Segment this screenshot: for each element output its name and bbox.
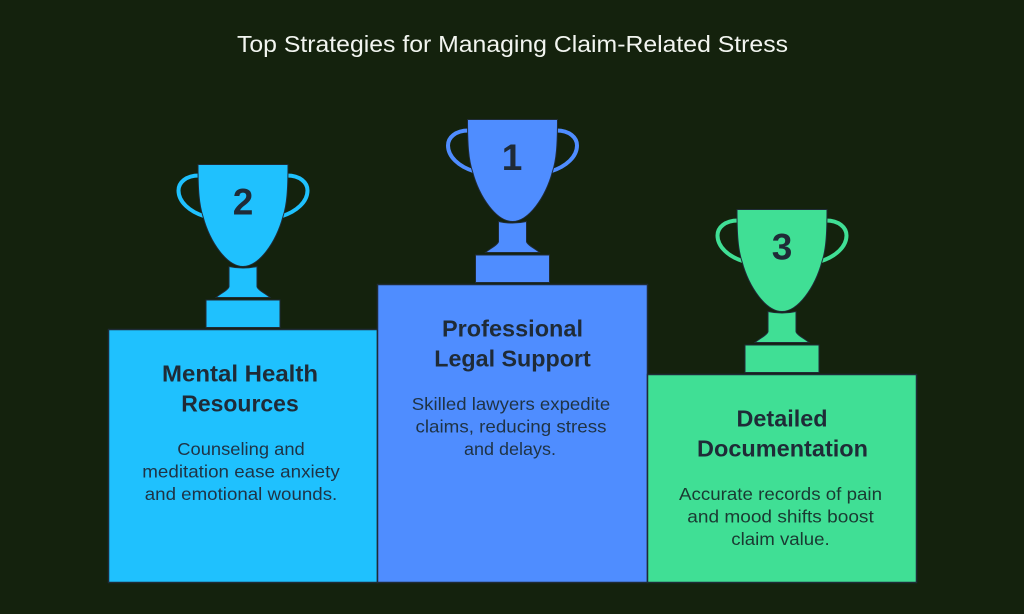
panel: professional legal support bbox=[378, 284, 648, 582]
text: legal support description: claims, reducing stress bbox=[416, 417, 607, 437]
icon: trophy 2: 2 bbox=[233, 182, 253, 222]
text: documentation description: Accurate records of pain bbox=[679, 484, 882, 504]
text: mental health description: meditation ease anxiety bbox=[142, 462, 340, 482]
text: mental health description: Counseling and bbox=[177, 439, 305, 459]
heading: detailed documentation: Detailed bbox=[736, 406, 828, 432]
text: documentation description: and mood shifts boost bbox=[687, 507, 874, 527]
heading: detailed documentation bbox=[697, 406, 868, 462]
icon: trophy 3 bbox=[718, 210, 846, 372]
text: documentation description bbox=[679, 484, 882, 549]
heading: professional legal support bbox=[434, 316, 591, 372]
text: legal support description: and delays. bbox=[464, 439, 556, 459]
heading: mental health resources: Mental Health bbox=[162, 361, 318, 387]
panel: mental health resources bbox=[108, 330, 378, 582]
heading: mental health resources: Resources bbox=[181, 391, 299, 417]
heading: detailed documentation: Documentation bbox=[697, 436, 868, 462]
icon: trophy 2 bbox=[178, 164, 308, 328]
heading: mental health resources bbox=[162, 361, 318, 417]
icon: trophy 3: 3 bbox=[772, 226, 792, 268]
heading: professional legal support: Professional bbox=[442, 316, 583, 342]
heading: professional legal support: Legal Support bbox=[434, 346, 591, 372]
text: legal support description bbox=[412, 394, 610, 459]
panel: detailed documentation bbox=[648, 374, 916, 582]
title: Top Strategies for Managing Claim-Related Stress bbox=[237, 31, 788, 57]
text: mental health description: and emotional wounds. bbox=[145, 484, 337, 504]
icon: trophy 1: 1 bbox=[502, 137, 522, 178]
text: legal support description: Skilled lawyers expedite bbox=[412, 394, 610, 414]
text: mental health description bbox=[142, 439, 340, 504]
icon: trophy 1 bbox=[448, 120, 577, 282]
text: documentation description: claim value. bbox=[731, 529, 830, 549]
